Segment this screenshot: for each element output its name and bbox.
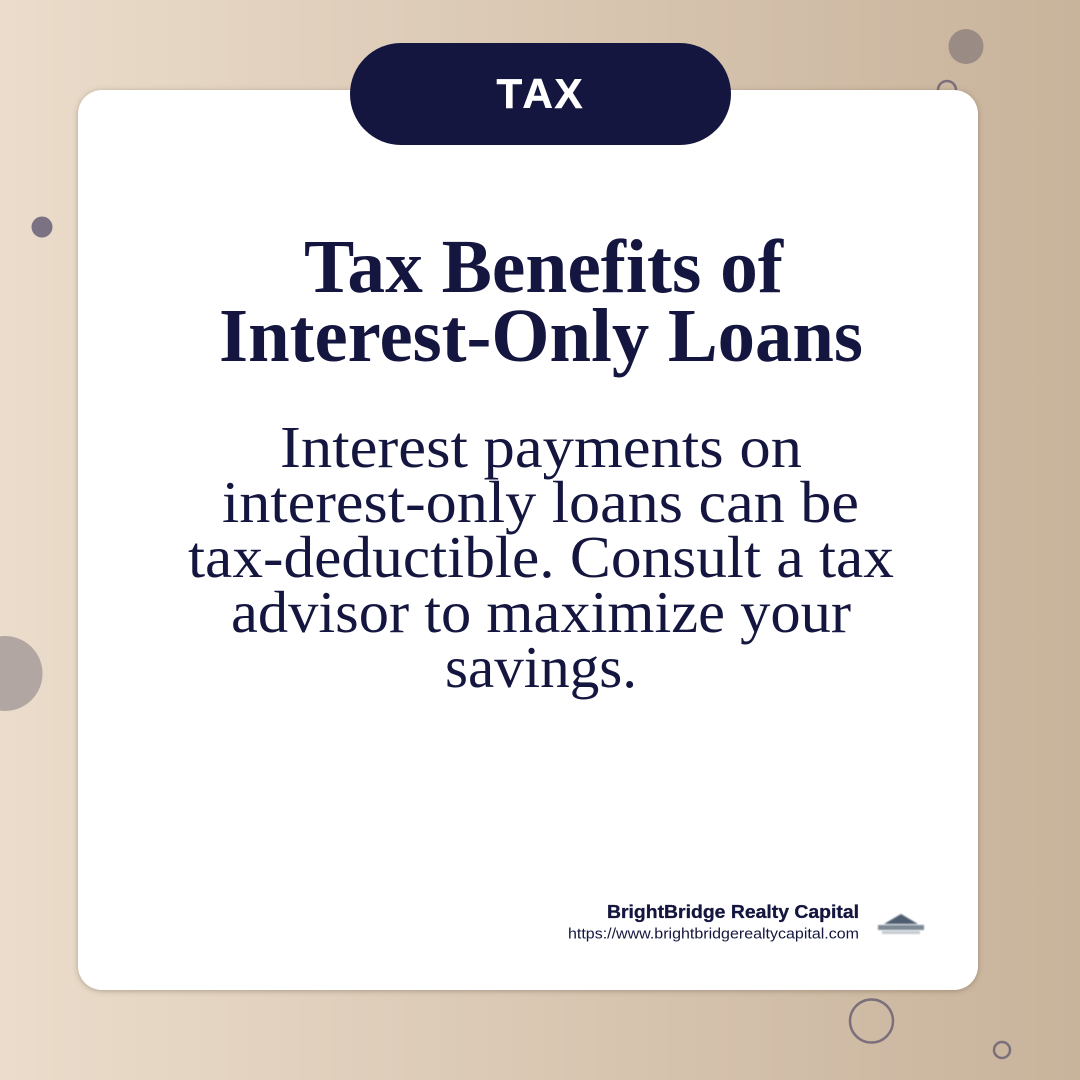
- category pill: [350, 43, 731, 145]
- decorative circle: top right filled: [948, 29, 984, 64]
- decorative ring: top right small: [938, 81, 956, 99]
- decorative ring: bottom large: [850, 1000, 893, 1042]
- body text: interest-only loans can be: [222, 469, 859, 535]
- body text: savings.: [445, 634, 637, 700]
- body text: advisor to maximize your: [231, 579, 851, 645]
- decorative circle: left large: [0, 636, 42, 711]
- pill label: TAX: [496, 70, 583, 117]
- icon: logo: [878, 914, 924, 934]
- title: [219, 225, 863, 378]
- decorative ring: bottom small: [994, 1042, 1010, 1058]
- footer brand: https://www.brightbridgerealtycapital.com: [568, 926, 859, 942]
- body text: [188, 414, 894, 700]
- white card: [78, 90, 978, 990]
- footer brand: [568, 902, 859, 942]
- title: Interest-Only Loans: [219, 294, 863, 378]
- footer brand: BrightBridge Realty Capital: [607, 902, 859, 922]
- body text: tax-deductible. Consult a tax: [188, 524, 894, 590]
- title: Tax Benefits of: [304, 225, 785, 309]
- decorative circle: left small: [32, 216, 52, 238]
- body text: Interest payments on: [280, 414, 802, 480]
